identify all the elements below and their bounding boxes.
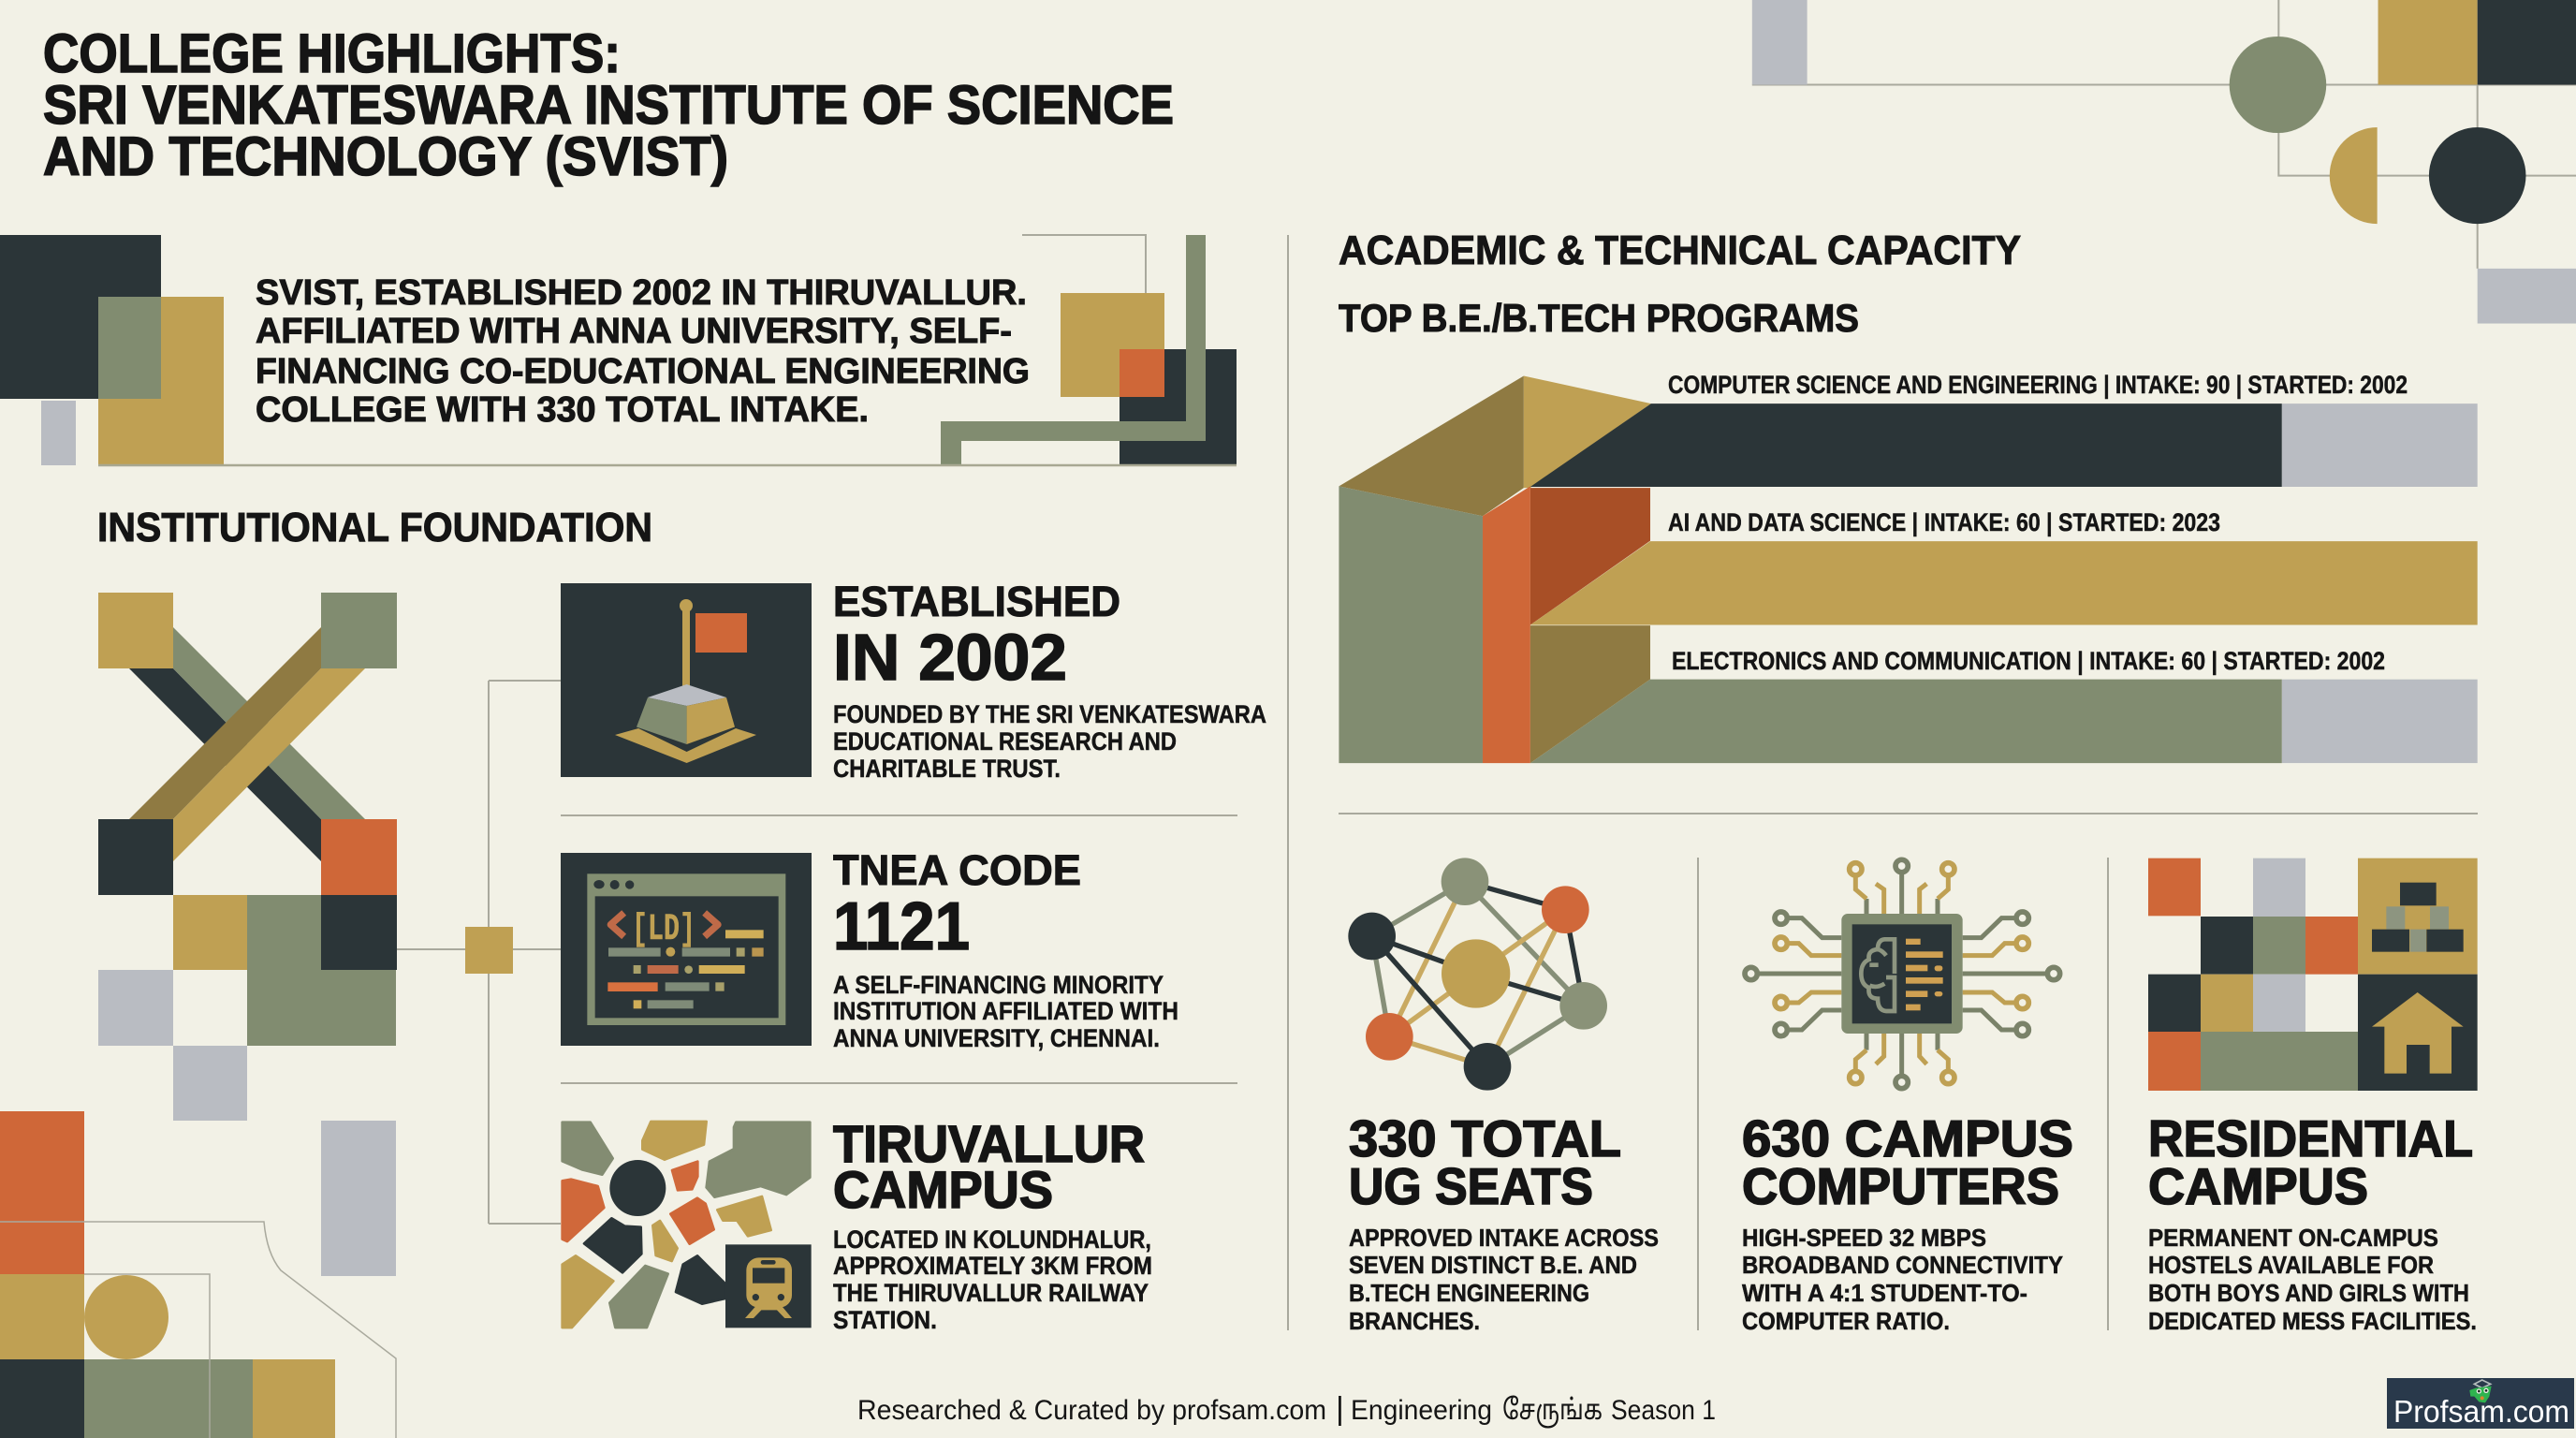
badge: Profsam.com [2387,1378,2574,1429]
title: AND TECHNOLOGY (SVIST) [43,126,728,187]
label: computer science: COMPUTER SCIENCE AND ENGINEERING | INTAKE: 90 | STARTED: 2002 [1668,371,2408,399]
icon: AI chip [1745,859,2060,1089]
text: Tiruvallur campus: CAMPUS [833,1160,1053,1219]
panel: intro decoration left [0,235,224,465]
intro text: FINANCING CO-EDUCATIONAL ENGINEERING [256,352,1030,391]
stat: 330 total UG seats: 330 TOTAL [1349,1109,1621,1167]
footer credit: | [1336,1391,1344,1427]
footer credit [857,1391,1716,1429]
stat: residential campus: BOTH BOYS AND GIRLS WITH [2148,1279,2469,1307]
stat: 330 total UG seats: BRANCHES. [1349,1307,1480,1335]
text: TNEA code: 1121 [833,889,970,964]
stat: 630 campus computers: BROADBAND CONNECTIVITY [1742,1251,2063,1279]
graphic: crossed bars mosaic [98,593,397,1276]
text: TNEA code: INSTITUTION AFFILIATED WITH [833,997,1178,1025]
stat: residential campus: RESIDENTIAL [2148,1109,2473,1167]
text: Tiruvallur campus: TIRUVALLUR [833,1114,1145,1173]
text: established: EDUCATIONAL RESEARCH AND [833,727,1177,756]
chart: isometric program bars [1339,371,2478,763]
text: TNEA code: TNEA CODE [833,846,1081,894]
stat: residential campus: CAMPUS [2148,1157,2368,1215]
text: Tiruvallur campus: STATION. [833,1306,937,1334]
text: TNEA code: ANNA UNIVERSITY, CHENNAI. [833,1024,1160,1052]
stat: 630 campus computers: WITH A 4:1 STUDENT-TO- [1742,1279,2027,1307]
stat: 630 campus computers: HIGH-SPEED 32 MBPS [1742,1224,1986,1252]
text: Tiruvallur campus: THE THIRUVALLUR RAILWAY [833,1279,1149,1307]
decoration: bottom left blocks [0,1111,396,1438]
heading: institutional foundation: INSTITUTIONAL FOUNDATION [97,505,652,550]
intro text: AFFILIATED WITH ANNA UNIVERSITY, SELF- [256,312,1012,351]
stat: 630 campus computers: 630 CAMPUS [1742,1109,2073,1167]
icon: residential mosaic [2148,858,2478,1091]
footer credit: Engineering [1351,1395,1492,1426]
stat: residential campus [2148,1109,2477,1335]
footer credit: Season 1 [1611,1395,1716,1426]
text: established [833,578,1266,783]
text: established: FOUNDED BY THE SRI VENKATESWARA [833,700,1266,728]
icon: campus map with train [563,1122,812,1328]
stat: residential campus: DEDICATED MESS FACILITIES. [2148,1307,2477,1335]
text: established: CHARITABLE TRUST. [833,755,1061,783]
label: AI and data science: AI AND DATA SCIENCE | INTAKE: 60 | STARTED: 2023 [1668,508,2220,536]
stat: 330 total UG seats: APPROVED INTAKE ACROSS [1349,1224,1659,1252]
badge: Profsam.com: Profsam.com [2393,1394,2569,1429]
icon: code window [561,853,812,1046]
stat: 330 total UG seats [1349,1109,1659,1335]
text: established: IN 2002 [833,621,1067,694]
stat: 330 total UG seats: SEVEN DISTINCT B.E. AND [1349,1251,1637,1279]
text: TNEA code: A SELF-FINANCING MINORITY [833,971,1164,999]
heading: top programs: TOP B.E./B.TECH PROGRAMS [1339,296,1859,340]
text: Tiruvallur campus [833,1114,1152,1334]
text: TNEA code [833,846,1178,1052]
decoration: top right geometry [1752,0,2576,324]
footer credit: Researched & Curated by profsam.com [857,1395,1326,1426]
icon: flag on plinth [561,583,812,777]
text: Tiruvallur campus: LOCATED IN KOLUNDHALUR, [833,1225,1151,1254]
title: SRI VENKATESWARA INSTITUTE OF SCIENCE [43,75,1174,136]
title: COLLEGE HIGHLIGHTS: [43,23,621,84]
text: established: ESTABLISHED [833,578,1120,625]
stat: 630 campus computers: COMPUTERS [1742,1157,2059,1215]
intro text [256,273,1030,430]
stat: 630 campus computers [1742,1109,2073,1335]
panel: intro decoration right [98,235,1237,465]
label: electronics and communication: ELECTRONICS AND COMMUNICATION | INTAKE: 60 | STARTED: 2002 [1672,647,2385,675]
text: Tiruvallur campus: APPROXIMATELY 3KM FROM [833,1252,1152,1280]
stat: residential campus: HOSTELS AVAILABLE FOR [2148,1251,2434,1279]
heading: academic and technical capacity: ACADEMIC & TECHNICAL CAPACITY [1339,227,2021,273]
icon: code window: [LD] [632,909,695,951]
intro text: COLLEGE WITH 330 TOTAL INTAKE. [256,390,869,430]
stat: 330 total UG seats: UG SEATS [1349,1157,1593,1215]
footer credit: சேருங்க [1502,1395,1603,1429]
stat: 630 campus computers: COMPUTER RATIO. [1742,1307,1950,1335]
intro text: SVIST, ESTABLISHED 2002 IN THIRUVALLUR. [256,273,1027,313]
stat: 330 total UG seats: B.TECH ENGINEERING [1349,1279,1589,1307]
stat: residential campus: PERMANENT ON-CAMPUS [2148,1224,2438,1252]
title [43,23,1174,187]
connector tree [397,681,561,1224]
icon: network nodes [1348,858,1607,1091]
